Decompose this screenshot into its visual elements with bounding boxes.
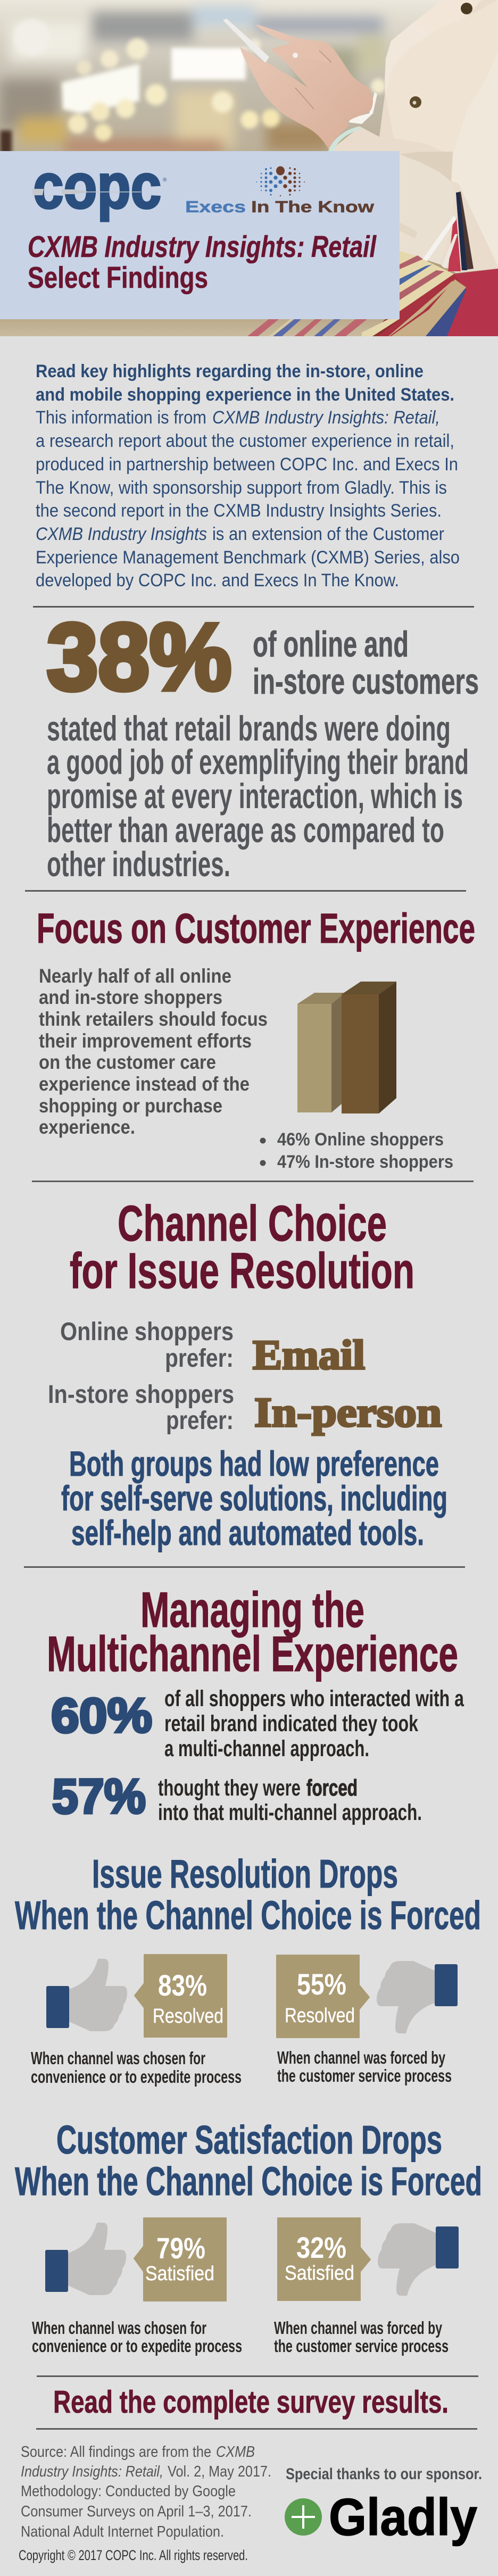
online shoppers prefer email: prefer: [165,1344,234,1373]
badge: 55% resolved: 55% [297,1967,346,2001]
intro text block: Experience Management Benchmark (CXMB) Series, also [36,547,460,568]
online shoppers prefer email: Email [253,1332,365,1378]
badge: 32% satisfied: 32% [296,2231,346,2264]
panel text: nearly half: think retailers should focus [39,1008,268,1030]
panel text: nearly half: their improvement efforts [39,1030,252,1052]
in-store shoppers prefer in-person: In-person [254,1389,442,1435]
caption: channel chosen [31,2048,242,2087]
intro text block: The Know, with sponsorship support from Gladly. This is [36,478,447,498]
hand and phone [348,92,377,124]
logo: Execs In The Know: Execs [185,197,246,216]
heading: Managing the Multichannel Experience [47,1582,458,1682]
report title [28,230,377,295]
heading: Channel Choice for Issue Resolution: Channel Choice [118,1195,387,1252]
online shoppers prefer email: Online shoppers [60,1318,234,1346]
icon: thumbs down, resolved [377,1961,458,2033]
report title: Select Findings [28,261,208,295]
icon: thumbs up, satisfied [45,2223,126,2295]
source note: Industry Insights: Retail, [21,2463,163,2480]
badge: 83% resolved: Resolved [153,2005,223,2027]
logo: COPC: ® [163,177,167,183]
icon: thumbs up, resolved [46,1959,127,2031]
source note: National Adult Internet Population. [21,2523,224,2540]
intro text block: is an extension of the Customer [212,524,444,544]
heading: Channel Choice for Issue Resolution [70,1195,414,1299]
intro text block: developed by COPC Inc. and Execs In The Know. [36,570,399,591]
heading: Customer Satisfaction Drops [15,2117,482,2204]
stat description: other industries. [47,844,230,884]
caption: channel chosen: convenience or to expedite process [31,2067,242,2087]
panel text: nearly half: experience. [39,1116,135,1138]
in-store shoppers prefer in-person [48,1381,442,1435]
zipper and cords [456,192,474,270]
caption: channel chosen, satisfaction: When channel was chosen for [32,2318,206,2338]
source note: Vol. 2, May 2017. [168,2463,271,2480]
stat: 60% [51,1686,464,1761]
intro text block: a research report about the customer experience in retail, [36,431,454,451]
caption: channel chosen, satisfaction: convenience or to expedite process [32,2336,242,2356]
bar: online shoppers 46% [297,993,345,1112]
channel preferences [48,1318,442,1435]
heading: Managing the Multichannel Experience: Managing the [140,1582,364,1638]
stat: 38% [47,604,479,710]
stat label: of online and [253,624,409,664]
panel text: nearly half: experience instead of the [39,1073,250,1095]
panel text: nearly half: shopping or purchase [39,1095,222,1117]
caption: channel forced, satisfaction [274,2318,449,2356]
stat: 57%: 57% [52,1769,146,1824]
online shoppers prefer email [60,1318,365,1378]
source note: Consumer Surveys on April 1–3, 2017. [21,2503,252,2520]
badge: 83% resolved: 83% [158,1968,207,2002]
stat description [47,709,469,884]
panel text: nearly half: Nearly half of all online [39,965,231,987]
heading: Issue Resolution Drops [15,1851,481,1938]
self-serve note [61,1444,447,1552]
chart legend: 46% Online shoppers [277,1129,444,1150]
panel text: nearly half: on the customer care [39,1051,216,1073]
intro text block: the second report in the CXMB Industry Insights Series. [36,501,442,521]
badge: 32% satisfied [278,2218,370,2300]
stat: 57%: forced [306,1775,358,1801]
icon: thumbs down, satisfied [378,2223,459,2296]
in-store shoppers prefer in-person: In-store shoppers [48,1381,234,1409]
stat: 60%: 60% [51,1689,152,1743]
intro text block: CXMB Industry Insights: Retail, [212,408,440,428]
logo: Execs In The Know: In The Know [251,197,375,216]
panel text: nearly half [39,965,268,1138]
caption: channel forced [277,2048,452,2085]
chart legend [260,1129,453,1172]
badge: 79% satisfied [134,2218,226,2301]
intro text block: CXMB Industry Insights [36,524,207,544]
bar: in-store shoppers 47% [342,982,396,1114]
coat [329,0,498,273]
stat: 60%: a multi-channel approach. [164,1736,369,1761]
title panel [0,151,400,319]
chart legend: 47% In-store shoppers [277,1152,453,1172]
logo: COPC: copc [33,151,161,222]
shopping bags [247,251,498,336]
badge: 55% resolved: Resolved [285,2005,355,2027]
badge: 83% resolved [135,1955,227,2037]
in-store shoppers prefer in-person: prefer: [166,1407,234,1435]
hero photo: shopper using phone [0,0,498,336]
logo: Execs In The Know [185,166,375,216]
intro text block: and mobile shopping experience in the United States. [36,385,454,405]
logo: Gladly: Gladly [329,2488,477,2546]
report title: CXMB Industry Insights: Retail [28,230,377,264]
coat buttons [461,3,472,14]
3D bar chart [297,982,396,1114]
intro text block: Read key highlights regarding the in-store, online [36,361,424,381]
intro text block: produced in partnership between COPC Inc. and Execs In [36,454,458,475]
stat: 57% [52,1769,422,1825]
source note: Source: All findings are from the [21,2444,211,2461]
big number 38%: 38% [47,604,231,710]
stat: 57%: thought they were [158,1775,301,1801]
caption: channel chosen, satisfaction [32,2318,242,2356]
source note: CXMB [216,2444,255,2461]
source note [21,2444,271,2540]
badge: 79% satisfied: Satisfied [145,2263,214,2285]
intro text block: This information is from [36,408,206,428]
badge: 79% satisfied: 79% [156,2231,205,2265]
copyright: Copyright © 2017 COPC Inc. All rights reserved. [19,2547,248,2563]
badge: 55% resolved [277,1955,369,2038]
stat label [253,624,479,702]
stat: 60%: retail brand indicated they took [164,1711,418,1736]
intro text block [36,361,460,591]
source note: Methodology: Conducted by Google [21,2483,236,2500]
caption: channel chosen: When channel was chosen for [31,2048,205,2068]
panel text: nearly half: and in-store shoppers [39,986,222,1008]
badge: 32% satisfied: Satisfied [285,2262,354,2284]
